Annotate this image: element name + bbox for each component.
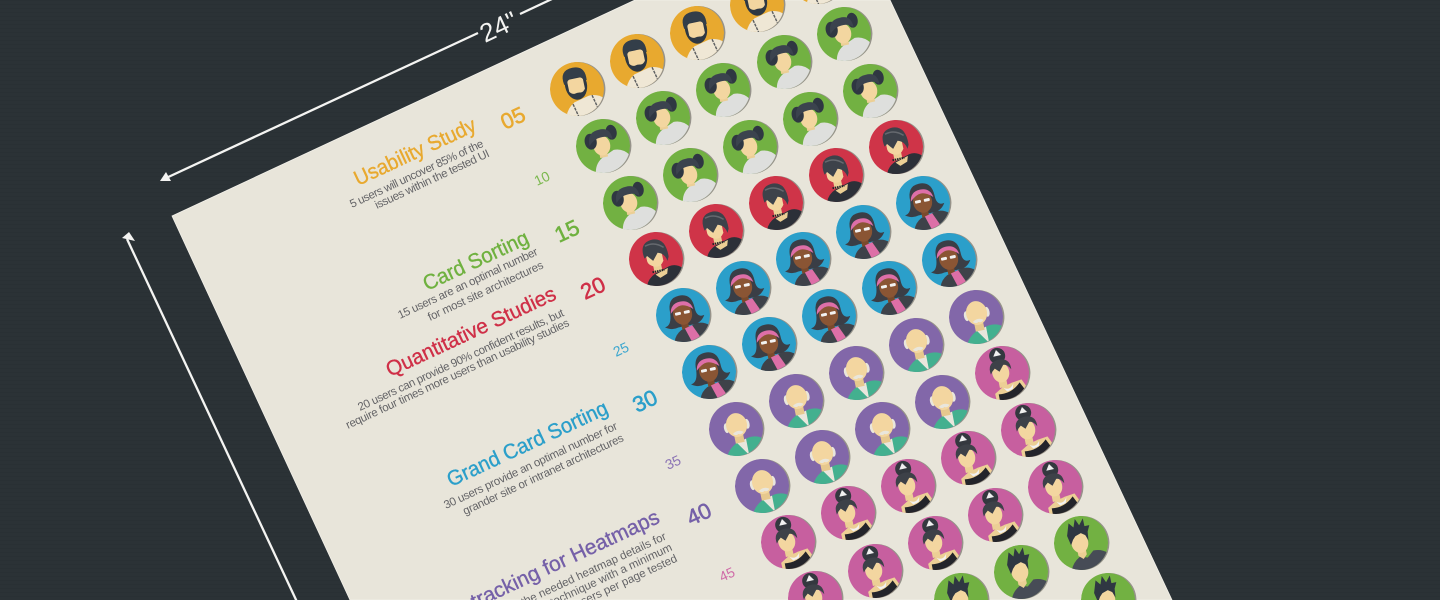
- section: Card Sorting: Card Sorting: [419, 227, 532, 296]
- dimension line: 24 inch width: 24": [475, 5, 522, 48]
- avatars: orange bearded men: [541, 0, 855, 128]
- section: Quantitative Studies: [344, 272, 609, 432]
- dimension line: height: [122, 232, 298, 600]
- section: Card Sorting: [396, 215, 583, 324]
- section: Usability Study: 05: [497, 102, 529, 135]
- section: Grand Card Sorting: Grand Card Sorting: [443, 397, 612, 492]
- section: Card Sorting: 15: [551, 215, 583, 248]
- dimension line: 24 inch width: [160, 0, 552, 181]
- section: Usability Study: issues within the tested UI: [373, 148, 492, 212]
- section: Quantitative Studies: Quantitative Studies: [382, 283, 560, 382]
- section: Quantitative Studies: 20 users can provide 90% confident results, but: [356, 307, 567, 414]
- section: Grand Card Sorting: 30 users provide an optimal number for: [442, 420, 620, 512]
- section: Usability Study: 5 users will uncover 85% of the: [348, 138, 486, 211]
- avatars: pink women with beehive hair: [752, 336, 1093, 600]
- avatars: green women with buns: [567, 0, 908, 242]
- section: Card Sorting: 15 users are an optimal number: [396, 246, 540, 322]
- section: Quantitative Studies: require four times more users than usability studies: [344, 317, 572, 432]
- number label: 35: 35: [663, 452, 684, 473]
- avatars: red women with side-swept hair: [620, 111, 934, 298]
- avatars: green men with spiky hair: [925, 507, 1146, 600]
- section: Usability Study: [348, 102, 529, 212]
- section: Eyetracking for Heatmaps: 40: [683, 498, 715, 531]
- section: Card Sorting: for most site architectures: [426, 259, 546, 324]
- section: Usability Study: Usability Study: [350, 114, 480, 191]
- section: Grand Card Sorting: grander site or intranet architectures: [461, 432, 626, 518]
- number label: 25: 25: [611, 339, 632, 360]
- paper poster: [172, 0, 1172, 600]
- number label: 10: 10: [532, 168, 553, 189]
- section: Grand Card Sorting: [442, 385, 661, 518]
- avatars: blue women with headbands: [647, 167, 987, 411]
- section: Grand Card Sorting: 30: [629, 385, 661, 418]
- number label: 45: 45: [717, 564, 738, 585]
- section: Quantitative Studies: 20: [577, 272, 609, 305]
- avatars: purple older men: [700, 281, 1014, 525]
